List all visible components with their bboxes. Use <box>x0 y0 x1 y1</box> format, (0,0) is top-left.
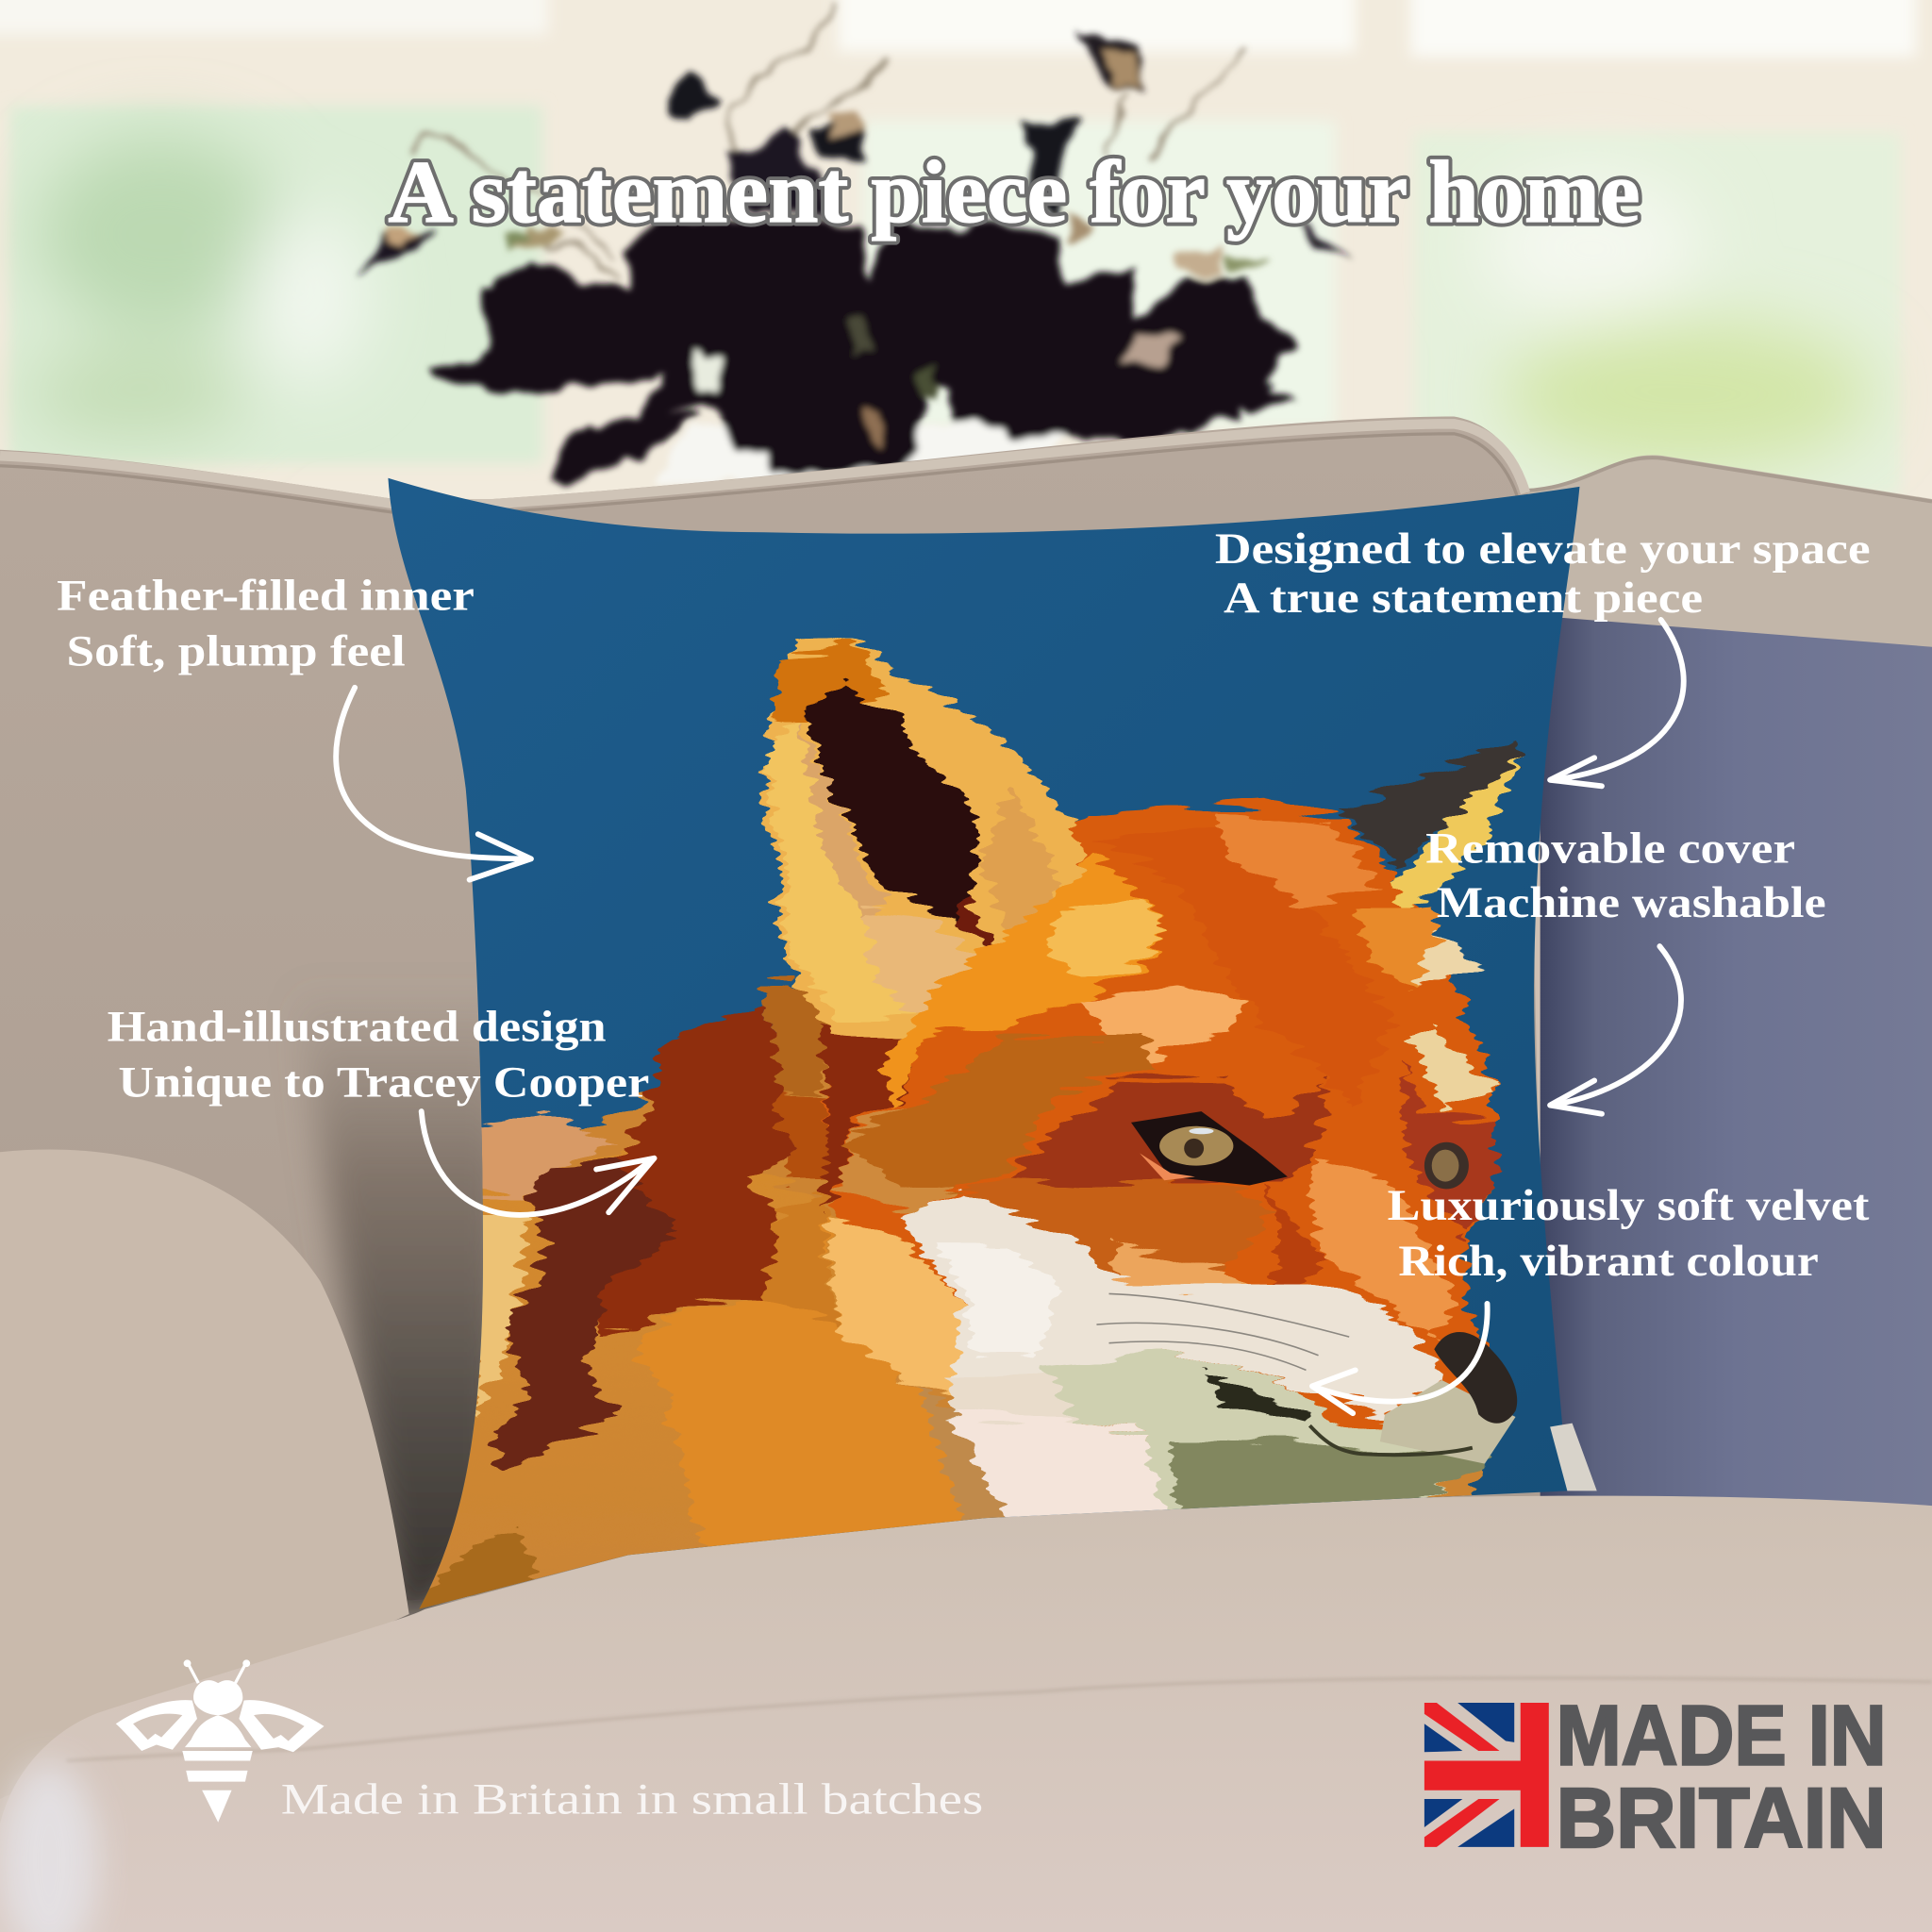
callout: hand-illustrated design <box>108 1003 649 1107</box>
brown shoulder <box>760 981 828 1095</box>
callout: removable cover <box>1425 824 1826 927</box>
ear base <box>765 636 1088 1036</box>
arrow: feather-filled inner <box>336 688 531 880</box>
green jaw <box>1170 1437 1493 1541</box>
title: A statement piece for your home <box>388 143 1640 242</box>
callout: feather-filled inner: Feather-filled inner <box>57 572 475 621</box>
ear inner dark <box>806 683 1047 974</box>
callout: removable cover: Machine washable <box>1437 878 1826 927</box>
right ear dark <box>1337 740 1521 865</box>
sofa seat <box>0 1496 1932 1932</box>
whiskers <box>1096 1293 1349 1370</box>
wordmark: BRITAIN <box>1557 1771 1887 1866</box>
callout: hand-illustrated design: Hand-illustrated design <box>108 1003 607 1052</box>
grey-green muzzle <box>1039 1351 1493 1541</box>
cheek top tan <box>841 1096 986 1214</box>
forehead orange patch <box>882 854 1170 1111</box>
wordmark: MADE IN <box>1557 1688 1887 1783</box>
arrow: hand-illustrated design <box>422 1111 655 1215</box>
callout: velvet: Rich, vibrant colour <box>1398 1237 1819 1286</box>
sofa <box>0 416 1932 1932</box>
flag <box>1424 1703 1549 1847</box>
dark gap beside cushion <box>295 986 506 1626</box>
small batches caption: Made in Britain in small batches <box>281 1775 983 1824</box>
callout: velvet <box>1388 1181 1870 1286</box>
body bright orange <box>632 1217 964 1547</box>
body maroon <box>596 1003 794 1335</box>
mouth dark <box>1201 1374 1309 1425</box>
right eye <box>1424 1142 1469 1189</box>
lower cheek <box>958 1179 1276 1283</box>
body corner shadow <box>419 1526 540 1609</box>
photo background: window <box>0 0 1932 518</box>
flower leaves top <box>1071 28 1147 95</box>
nose <box>1434 1332 1517 1424</box>
callout: statement piece: A true statement piece <box>1224 574 1703 623</box>
body dark brown strip <box>495 1162 676 1473</box>
ruff tan edge <box>918 1386 1017 1553</box>
fox illustration <box>370 636 1521 1651</box>
head base <box>819 798 1501 1436</box>
back cushion right <box>1522 456 1932 665</box>
fox face details <box>1096 1111 1517 1464</box>
forehead red streak <box>1096 825 1392 1109</box>
blue-grey pillow <box>1541 616 1932 1513</box>
body mid orange <box>765 1179 837 1327</box>
neck dark <box>820 1024 921 1212</box>
logo: made in Britain <box>1424 1688 1887 1866</box>
plant with dark flowers <box>353 0 1352 484</box>
chest pale fill <box>949 1374 1084 1436</box>
callout: feather-filled inner: Soft, plump feel <box>67 626 406 675</box>
snout peach <box>1309 1157 1457 1340</box>
body dark orange <box>773 1095 845 1179</box>
arrow: statement piece <box>1550 620 1684 786</box>
title: A statement piece for your home <box>388 143 1640 242</box>
mouth line <box>1309 1425 1473 1455</box>
snout underside <box>1380 1380 1516 1464</box>
left eye <box>1131 1111 1288 1185</box>
callout: statement piece <box>1215 525 1871 623</box>
icon: bee <box>116 1659 325 1823</box>
callout: velvet: Luxuriously soft velvet <box>1388 1181 1870 1230</box>
white chest <box>950 1411 1171 1541</box>
arrow: removable cover <box>1550 946 1681 1114</box>
cushion: blue velvet <box>388 478 1579 1609</box>
tan leaves <box>828 113 857 138</box>
body underlay <box>558 1061 1483 1498</box>
ear inner tan <box>801 722 887 918</box>
sofa arm <box>0 1150 409 1799</box>
brown cheek <box>844 1036 1152 1191</box>
body left pale fur <box>475 1217 527 1417</box>
body tan top <box>475 1116 612 1196</box>
callout: feather-filled inner <box>57 572 475 675</box>
body base <box>483 1150 792 1300</box>
callout: statement piece: Designed to elevate your space <box>1215 525 1871 574</box>
wordmark <box>1557 1688 1887 1866</box>
ear tip <box>776 648 890 722</box>
callout: removable cover: Removable cover <box>1425 824 1795 873</box>
arrow: velvet <box>1312 1304 1488 1413</box>
ear <box>765 636 1088 1036</box>
cushion label tag <box>1550 1424 1597 1491</box>
right ear gold <box>1391 757 1521 910</box>
vase <box>653 425 1072 483</box>
ear outer pale <box>768 722 918 1017</box>
right cheek fur <box>1356 906 1441 991</box>
eye mask dark red <box>1011 1082 1325 1185</box>
callout: hand-illustrated design: Unique to Tracey Cooper <box>118 1058 649 1107</box>
ruff pale orange <box>828 1217 962 1398</box>
snout red stripe <box>1267 1185 1325 1305</box>
ear right tan <box>979 789 1059 961</box>
back cushions <box>0 416 1546 1626</box>
white muzzle <box>899 1188 1445 1414</box>
right side dark red <box>1402 1064 1493 1237</box>
main flower mass <box>432 213 1299 472</box>
